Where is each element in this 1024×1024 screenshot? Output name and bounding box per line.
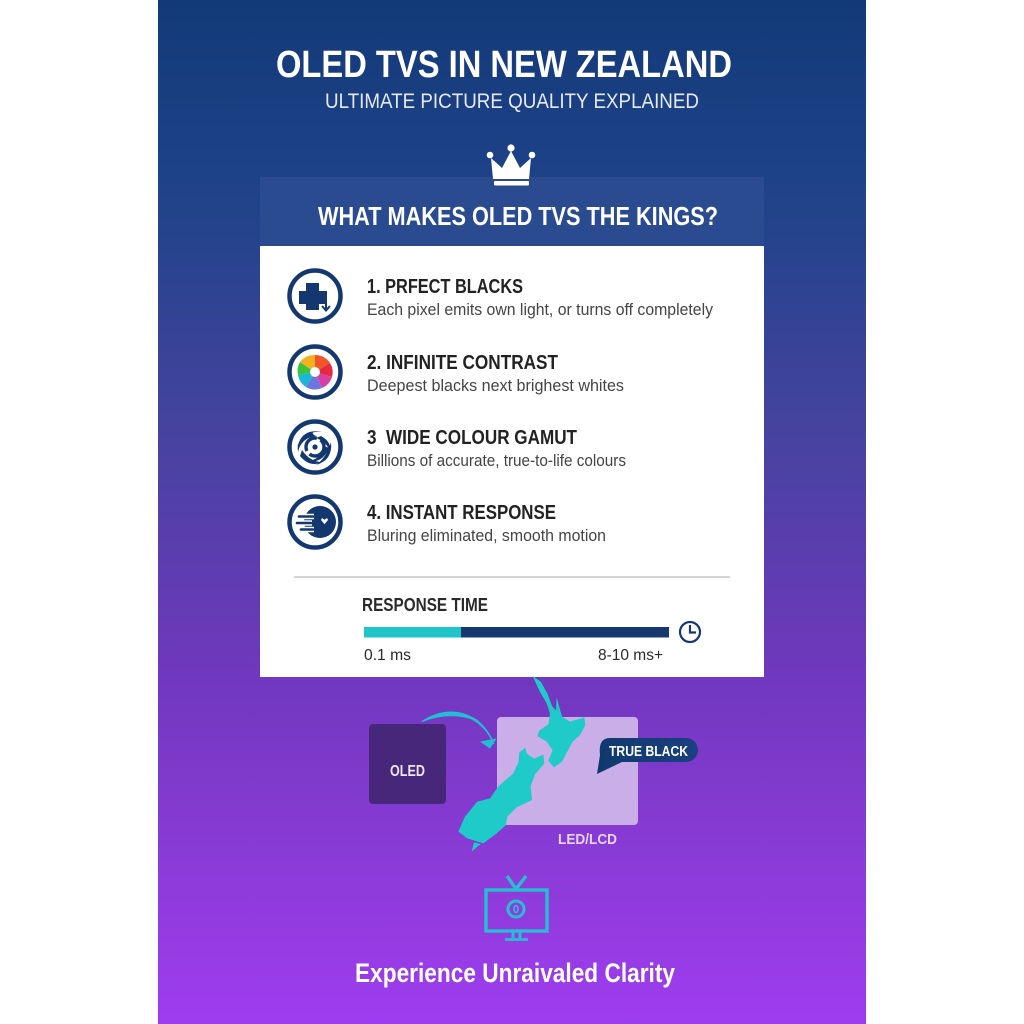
callout: true black [597, 738, 698, 774]
label: LED/LCD: LED/LCD [558, 832, 617, 848]
feature 4 description: Bluring eliminated, smooth motion [367, 526, 606, 545]
feature 4: instant response [290, 496, 606, 548]
icon: swirl [290, 422, 340, 472]
label: 8-10 ms+: 8-10 ms+ [598, 647, 663, 664]
bar: OLED segment [364, 627, 461, 638]
feature 3 title: 3 WIDE COLOUR GAMUT [367, 427, 577, 449]
feature 1 title: 1. PRFECT BLACKS [367, 276, 523, 298]
panel: white features card [260, 246, 764, 677]
footer tagline: Experience Unraivaled Clarity [355, 958, 675, 988]
subtitle: ULTIMATE PICTURE QUALITY EXPLAINED [325, 90, 699, 113]
title: OLED TVS IN NEW ZEALAND [276, 44, 732, 86]
background panel [158, 0, 866, 1024]
feature 2 title: 2. INFINITE CONTRAST [367, 352, 558, 374]
bar: LED segment [461, 627, 669, 638]
chart title: RESPONSE TIME [362, 595, 488, 615]
icon: plus with arrow [290, 270, 340, 322]
feature 3: wide colour gamut [290, 422, 626, 472]
callout: true black: TRUE BLACK [609, 744, 688, 760]
feature 2: infinite contrast [290, 346, 624, 398]
LED/LCD box [497, 717, 638, 825]
feature 1: perfect blacks [290, 270, 713, 322]
feature 4 title: 4. INSTANT RESPONSE [367, 502, 556, 524]
icon: colour wheel [290, 346, 340, 398]
icon: TV [486, 876, 547, 940]
icon: clock [680, 622, 700, 642]
map: New Zealand [458, 676, 585, 852]
response time chart [362, 595, 700, 664]
OLED box: OLED [390, 763, 425, 780]
icon: speeding circle [290, 496, 340, 548]
arrow: OLED to LED [422, 712, 497, 749]
feature 2 description: Deepest blacks next brighest whites [367, 376, 624, 395]
panel: heading band [260, 177, 764, 247]
feature 3 description: Billions of accurate, true-to-life colours [367, 451, 626, 470]
icon: crown [487, 144, 535, 186]
OLED box [369, 724, 446, 804]
feature 1 description: Each pixel emits own light, or turns off completely [367, 300, 713, 319]
heading: WHAT MAKES OLED TVS THE KINGS? [318, 201, 718, 231]
label: 0.1 ms: 0.1 ms [364, 647, 411, 664]
